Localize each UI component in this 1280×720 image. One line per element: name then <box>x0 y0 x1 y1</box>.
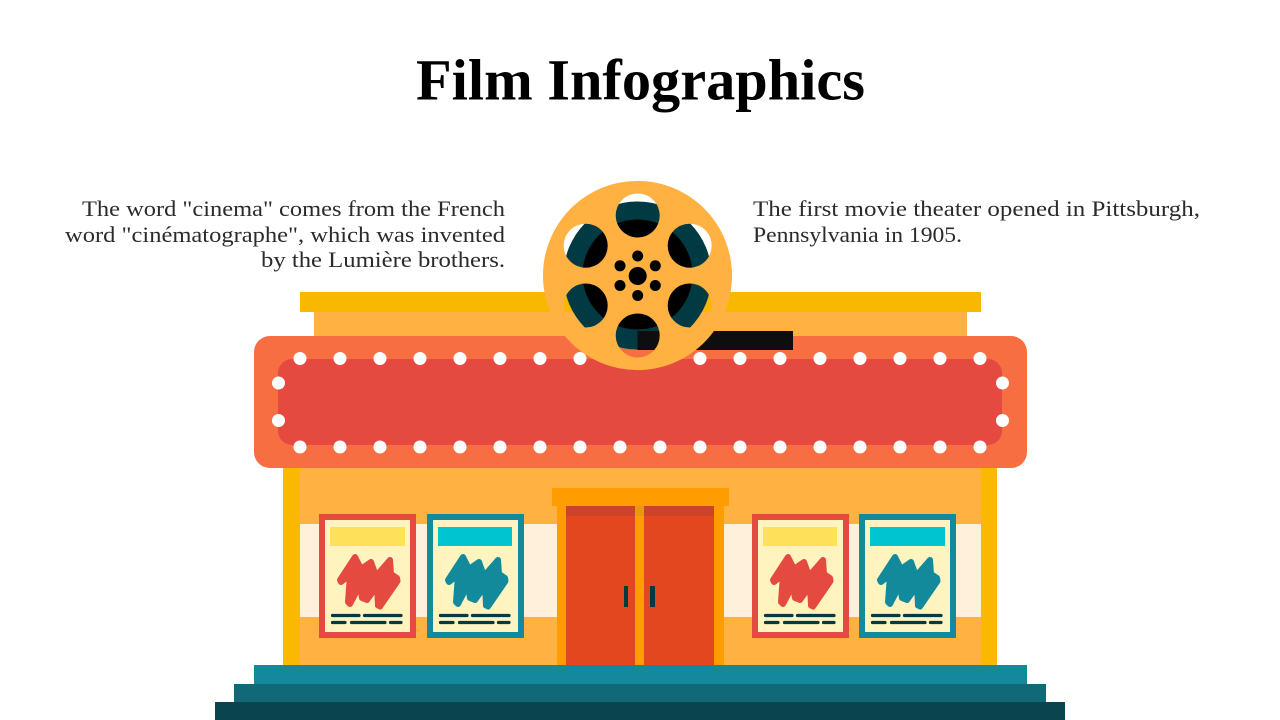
title: Film Infographics <box>416 48 865 112</box>
cinema building <box>215 292 1065 720</box>
steps <box>215 665 1065 720</box>
building body <box>283 460 997 665</box>
roof <box>300 292 981 342</box>
poster 3 <box>752 514 849 638</box>
marquee bulbs <box>272 352 1009 454</box>
text block: cinema origin: The word "cinema" comes from the French <box>82 196 505 221</box>
text block: cinema origin <box>65 196 505 272</box>
text block: first theater: The first movie theater opened in Pittsburgh, <box>753 196 1200 221</box>
text block: cinema origin: by the Lumière brothers. <box>261 247 505 272</box>
entrance doors <box>552 488 729 665</box>
text block: first theater <box>753 196 1200 247</box>
poster 2 <box>427 514 524 638</box>
icon: film reel <box>543 181 793 370</box>
text block: first theater: Pennsylvania in 1905. <box>753 222 962 247</box>
poster 1 <box>319 514 416 638</box>
poster 4 <box>859 514 956 638</box>
text block: cinema origin: word "cinématographe", which was invented <box>65 222 505 247</box>
marquee sign <box>254 336 1027 468</box>
